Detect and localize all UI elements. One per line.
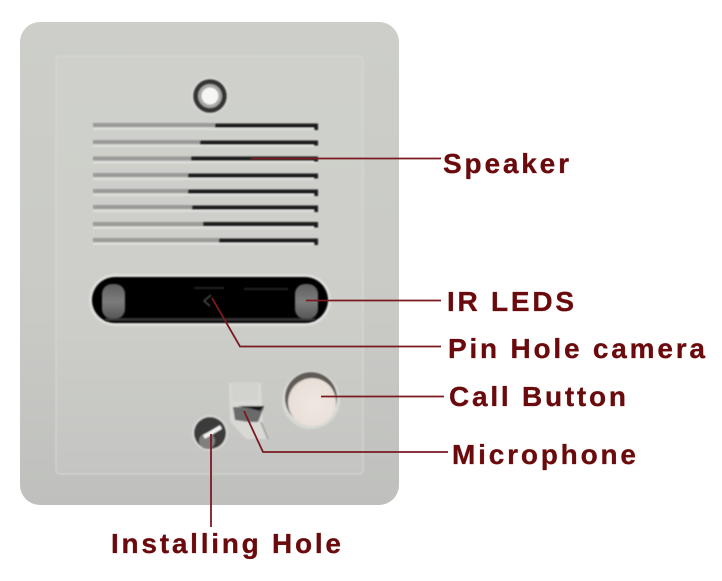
label: Speaker: Speaker: [443, 148, 569, 179]
arrow: microphone leader: [244, 411, 448, 452]
icon: right IR LED: [295, 284, 318, 319]
camera window: [89, 274, 331, 326]
label: IR LEDS: IR LEDS: [447, 286, 574, 317]
icon: installing hole: [192, 415, 228, 451]
arrow: speaker leader: [251, 158, 441, 160]
speaker grille slots: [93, 125, 318, 245]
label: Call Button: Call Button: [449, 381, 626, 412]
label: Pin Hole camera: Pin Hole camera: [448, 333, 705, 364]
arrow: pin hole camera leader: [212, 298, 441, 346]
panel: intercom faceplate: [20, 22, 399, 505]
label: Installing Hole: Installing Hole: [111, 528, 341, 559]
arrow: call button leader: [321, 396, 444, 398]
icon: left IR LED: [102, 284, 125, 319]
icon: pin hole camera: [194, 288, 288, 306]
arrow: IR LEDs leader: [306, 300, 441, 302]
leader lines: [211, 158, 448, 527]
arrow: installing hole leader: [210, 434, 212, 527]
icon: top screw hole: [191, 77, 229, 115]
icon: microphone housing: [229, 383, 268, 439]
icon: call button: [282, 371, 340, 429]
label: Microphone: Microphone: [452, 439, 636, 470]
inner raised panel: [56, 56, 363, 474]
